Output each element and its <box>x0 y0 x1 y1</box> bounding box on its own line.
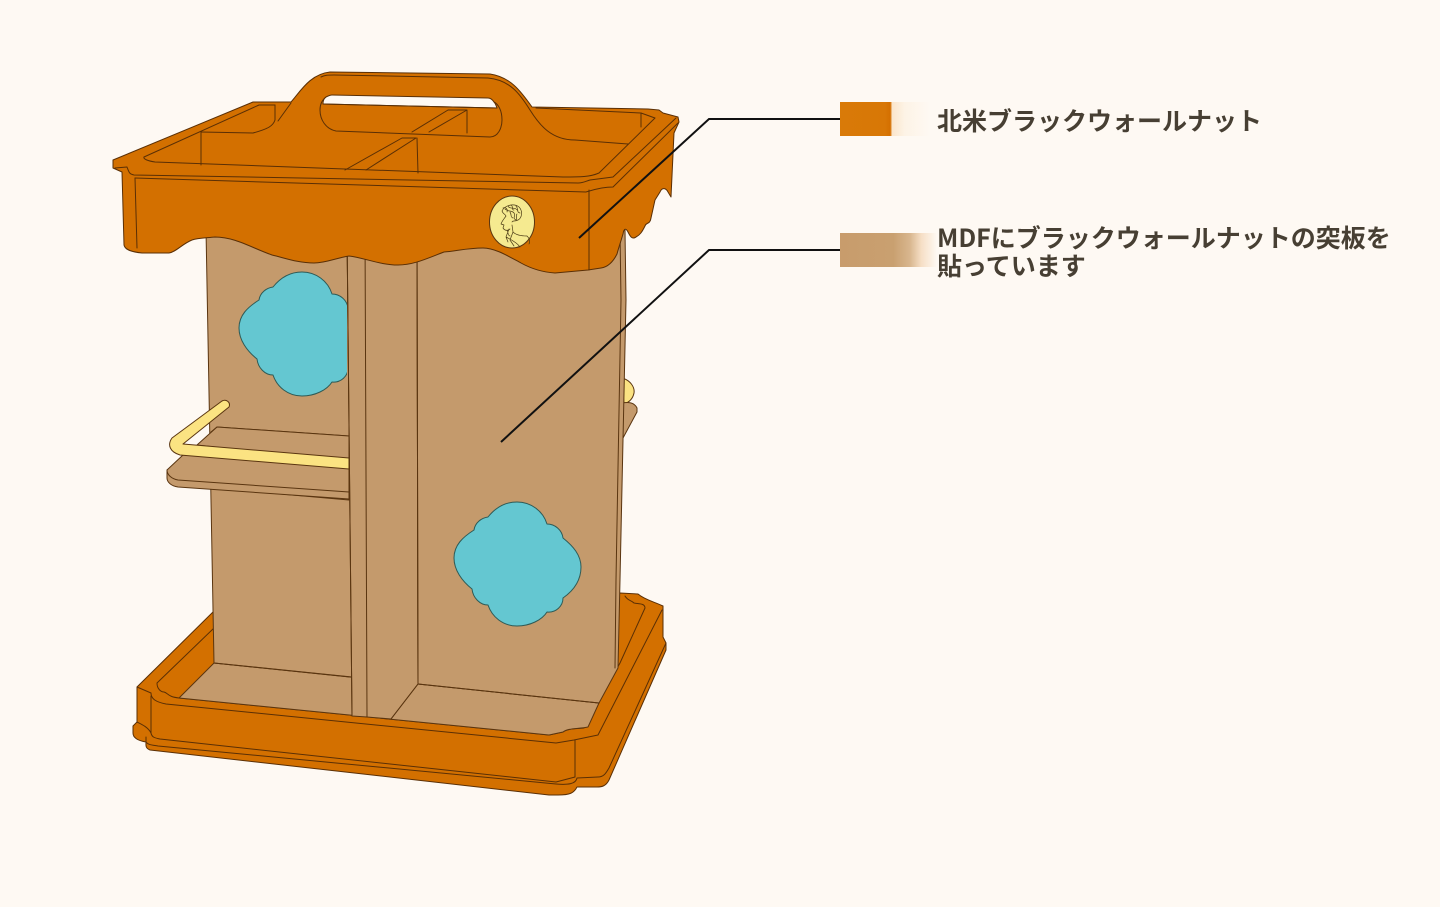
bottom tray <box>133 593 666 795</box>
handle opening <box>323 95 497 108</box>
label: MDF veneer: 貼っています <box>937 247 1086 283</box>
cloud window: upper left <box>238 272 347 396</box>
center column <box>347 230 418 719</box>
body: wooden panels <box>179 230 626 735</box>
swatch: veneer tan <box>840 233 937 267</box>
inner rim <box>144 104 655 177</box>
illustration: organizer stand <box>112 72 840 796</box>
rim edges <box>115 118 676 183</box>
label: MDF veneer: MDFにブラックウォールナットの突板を <box>937 219 1391 255</box>
leader line: top material <box>579 119 840 238</box>
swatch: walnut orange <box>840 102 930 136</box>
leader line: panel material <box>501 250 840 442</box>
gold medallion <box>490 196 534 248</box>
far-side shelf and rail <box>622 378 637 438</box>
label: MDF veneer <box>937 219 1391 283</box>
left panel <box>206 230 352 677</box>
shelf with rail <box>167 400 349 500</box>
label: walnut: 北米ブラックウォールナット <box>937 102 1262 138</box>
right panel <box>417 230 626 703</box>
top tray with handle <box>113 72 679 273</box>
tray floor <box>179 663 599 735</box>
dividers <box>201 110 467 173</box>
yellow rail <box>170 400 349 469</box>
cloud window: lower right <box>454 502 581 626</box>
